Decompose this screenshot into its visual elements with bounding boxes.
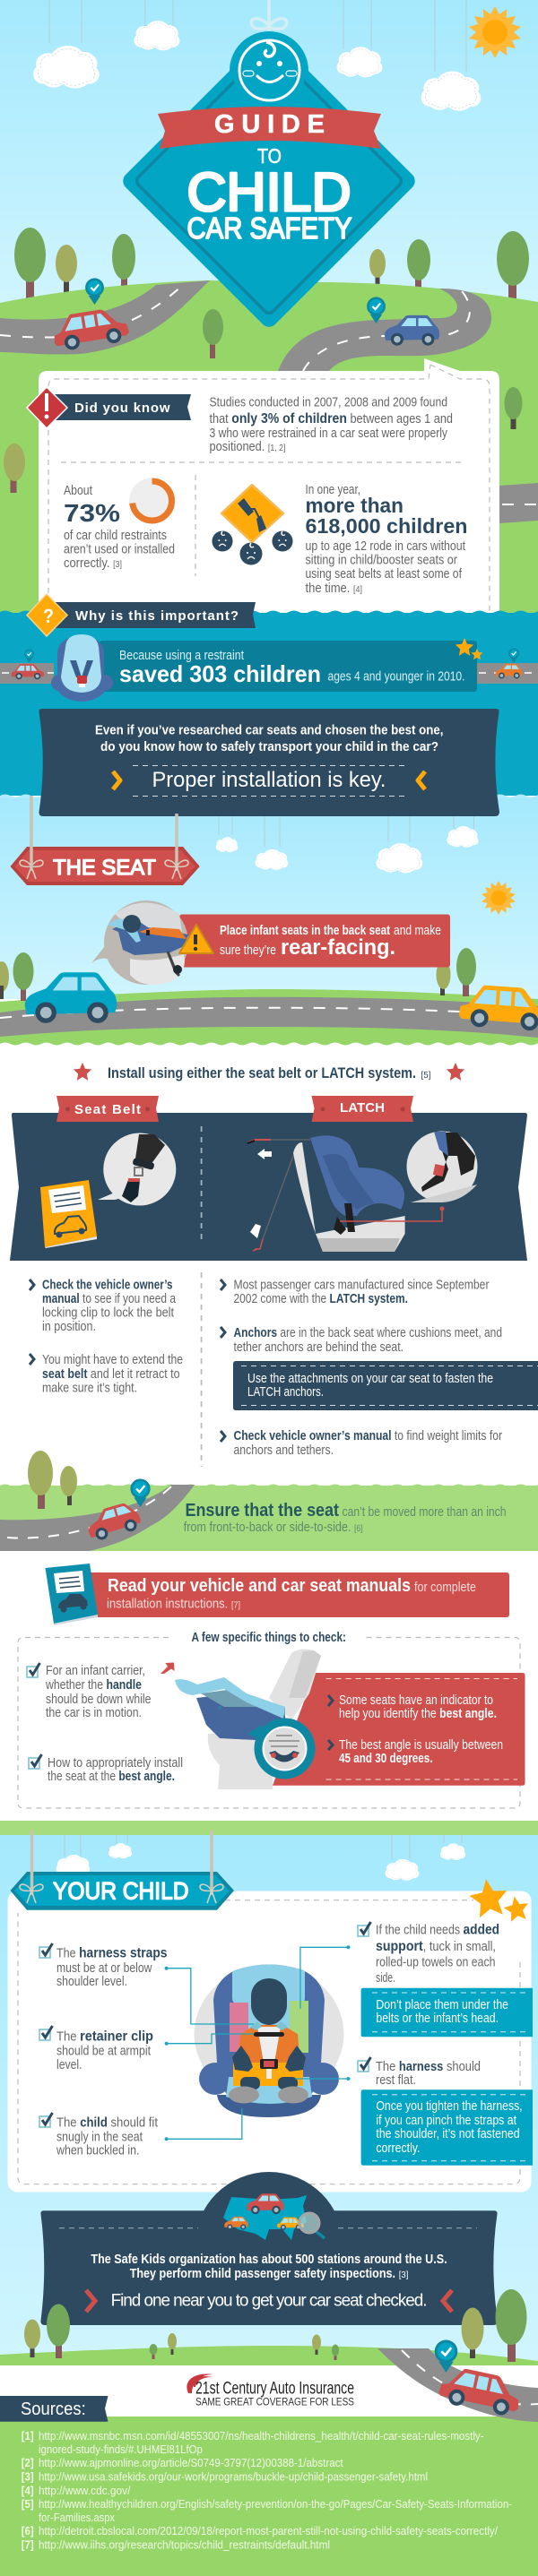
icon: manual book bbox=[45, 1564, 98, 1625]
diamond sign bbox=[119, 0, 419, 331]
hills bbox=[0, 280, 538, 618]
car: blue hatchback bbox=[25, 972, 117, 1023]
source list: [6] bbox=[22, 2525, 34, 2537]
checklist item: angle: the seat at the best angle. bbox=[48, 1770, 175, 1784]
title: GUIDE bbox=[214, 110, 325, 139]
source list: [3] bbox=[22, 2471, 34, 2484]
heading: the seat: THE SEAT bbox=[53, 856, 156, 880]
item: retainer clip: should be at armpit bbox=[56, 2045, 151, 2059]
stat: 618,000 children: more than bbox=[305, 494, 404, 517]
callout: rear-facing: Place infant seats in the back seat bbox=[220, 924, 390, 938]
ribbon bow bbox=[251, 0, 287, 30]
heading: why is this important: ? bbox=[43, 605, 54, 627]
callout: rear-facing: rear-facing. bbox=[281, 935, 395, 960]
item: harness flat: rest flat. bbox=[376, 2073, 416, 2088]
heading: A few specific things to check: bbox=[192, 1630, 346, 1645]
arrow: handle bbox=[161, 1663, 174, 1674]
item: harness straps: The harness straps bbox=[56, 1946, 168, 1960]
heading: the seat bbox=[11, 797, 200, 885]
tab: latch: LATCH bbox=[340, 1100, 385, 1116]
car: yellow wagon bbox=[458, 984, 538, 1032]
icon: warning triangle bbox=[179, 925, 213, 953]
source list: ignored-study-finds/#.UHMEl81LfOp bbox=[39, 2443, 203, 2456]
item: harness straps: must be at or below bbox=[56, 1961, 152, 1976]
callout: rear-facing: and make bbox=[394, 924, 441, 938]
text: ensure: can’t be moved more than an inch bbox=[343, 1505, 506, 1520]
item: harness straps bbox=[39, 1943, 168, 1989]
item: child fit: The child should fit bbox=[56, 2116, 158, 2131]
panel: safe kids bbox=[40, 2172, 498, 2325]
section: the seat bbox=[0, 797, 538, 1047]
donut chart bbox=[129, 478, 175, 523]
logo: 21st Century Auto Insurance bbox=[187, 2374, 354, 2408]
callout: angle: 45 and 30 degrees. bbox=[339, 1752, 432, 1766]
tree olive left bbox=[4, 444, 25, 493]
item: added support bbox=[358, 1922, 499, 1986]
seat belt list: locking clip to lock the belt bbox=[42, 1306, 174, 1321]
callout: angle: help you identify the best angle. bbox=[339, 1707, 497, 1721]
latch list bbox=[221, 1278, 502, 1458]
heading: why is this important bbox=[27, 594, 256, 636]
section: instructions text bbox=[0, 1272, 538, 1551]
text: stations: [3] bbox=[399, 2270, 409, 2280]
panel: dark illustrations bbox=[10, 1096, 527, 1261]
callout: towels: Don’t place them under the bbox=[376, 1998, 508, 2012]
checklist item: handle bbox=[27, 1663, 151, 1720]
title: CAR SAFETY bbox=[187, 211, 351, 245]
seat belt list: You might have to extend the bbox=[42, 1353, 183, 1367]
stat: 73 percent: About bbox=[64, 484, 92, 498]
item: harness straps: shoulder level. bbox=[56, 1975, 127, 1989]
seat belt list bbox=[30, 1278, 183, 1396]
item: harness flat bbox=[358, 2057, 481, 2088]
callout: attachments: LATCH anchors. bbox=[247, 1385, 324, 1400]
source list: http://www.usa.safekids.org/our-work/programs/buckle-up/child-passenger-safety.html bbox=[39, 2471, 428, 2484]
item: retainer clip: The retainer clip bbox=[56, 2029, 153, 2045]
heading: sources: Sources: bbox=[21, 2399, 86, 2419]
heading: your child: YOUR CHILD bbox=[53, 1878, 188, 1905]
stat: 618,000 children: the time. [4] bbox=[305, 582, 362, 596]
checklist item: handle: should be down while bbox=[46, 1693, 151, 1707]
illustration: US map with cars bbox=[223, 2193, 325, 2240]
text: ensure: Ensure that the seat bbox=[185, 1501, 339, 1521]
illustration: infant carrier on seat bbox=[175, 1650, 321, 1789]
item: retainer clip: level. bbox=[56, 2058, 82, 2072]
banner: Read your vehicle and car seat manuals bbox=[108, 1576, 411, 1596]
icon: angle gauge bbox=[247, 1719, 316, 1779]
left road bbox=[0, 280, 210, 355]
section: read the manuals bbox=[18, 1564, 525, 1808]
item: retainer clip bbox=[39, 2026, 153, 2072]
question text: Even if you’ve researched car seats and chosen the best one, bbox=[95, 722, 443, 738]
logo: 21st Century Auto Insurance: 21st Century Auto Insurance bbox=[195, 2380, 354, 2398]
car: red bbox=[83, 1500, 143, 1543]
icon: baby face bbox=[239, 40, 299, 100]
checklist item: handle: the car is in motion. bbox=[46, 1706, 142, 1720]
icon: sun bbox=[482, 881, 516, 915]
callout: attachments: Use the attachments on your car seat to fasten the bbox=[247, 1372, 493, 1386]
tab: seat belt: Seat Belt bbox=[74, 1102, 141, 1117]
text: studies bbox=[210, 396, 453, 454]
latch list: Check vehicle owner’s manual to find weight limits for bbox=[233, 1429, 502, 1443]
tree right bbox=[504, 387, 522, 429]
trees bbox=[24, 2289, 527, 2362]
chevrons bbox=[86, 2290, 452, 2312]
ribbon bbox=[158, 107, 381, 149]
connector lines bbox=[165, 1945, 350, 2141]
illustration: rear-facing infant seat bbox=[91, 900, 213, 985]
item: child fit: when buckled in. bbox=[56, 2143, 139, 2158]
item: added support: rolled-up towels on each bbox=[376, 1955, 495, 1969]
marker bbox=[435, 2340, 457, 2373]
banner: installation instructions. [7] bbox=[107, 1597, 240, 1611]
banner: for complete bbox=[414, 1581, 476, 1595]
checklist item: angle: How to appropriately install bbox=[48, 1756, 183, 1770]
illustration: seat belt buckle bubble bbox=[98, 1133, 176, 1206]
trees bbox=[0, 948, 476, 1001]
strings and clouds bbox=[65, 1835, 462, 1859]
seat belt list: in position. bbox=[42, 1320, 96, 1334]
stat: 73 percent: aren’t used or installed bbox=[64, 543, 175, 557]
source list: [5] bbox=[22, 2498, 34, 2511]
callout: rear-facing bbox=[179, 914, 450, 968]
text: stations: The Safe Kids organization has about 500 stations around the U.S. bbox=[91, 2252, 447, 2267]
callout: pinch test bbox=[361, 2089, 533, 2166]
illustration: child in seat bbox=[194, 1964, 344, 2117]
panel: proper installation bbox=[31, 709, 499, 874]
checklist item: handle: For an infant carrier, bbox=[46, 1664, 145, 1678]
road bbox=[0, 1485, 195, 1551]
title: CHILD bbox=[187, 162, 351, 222]
seat belt list: make sure it’s tight. bbox=[42, 1382, 137, 1396]
heading: why is this important: Why is this important? bbox=[75, 608, 239, 624]
source list: [2] bbox=[22, 2457, 34, 2469]
road bbox=[0, 997, 538, 1038]
callout: pinch test: if you can pinch the straps at bbox=[376, 2114, 516, 2128]
callout: rear-facing: sure they’re bbox=[220, 943, 276, 958]
callout: angle: Some seats have an indicator to bbox=[339, 1693, 493, 1708]
key message: Find one near you to get your car seat checked. bbox=[111, 2292, 428, 2310]
source list: [4] bbox=[22, 2485, 34, 2497]
source list: http://www.msnbc.msn.com/id/48553007/ns/health-childrens_health/t/child-car-seat-rules-mostly- bbox=[39, 2430, 484, 2442]
tree by road bbox=[203, 309, 223, 358]
text: studies: positioned. [1, 2] bbox=[210, 440, 286, 454]
latch list: 2002 come with the LATCH system. bbox=[233, 1292, 408, 1306]
stat: 73 percent bbox=[64, 478, 175, 571]
callout: towels bbox=[361, 1988, 533, 2037]
road strip with cars bbox=[0, 648, 538, 684]
banner bbox=[85, 1572, 509, 1617]
strings and clouds bbox=[219, 816, 473, 847]
question text bbox=[95, 722, 443, 754]
water band wave overlay bbox=[0, 609, 538, 622]
car: red wagon bbox=[437, 2365, 524, 2418]
source list: [7] bbox=[22, 2539, 34, 2552]
red car bbox=[50, 278, 131, 352]
icon: car seat bbox=[51, 634, 113, 702]
icon: owner's manual book bbox=[40, 1180, 97, 1248]
text: stations bbox=[91, 2252, 447, 2281]
callout band: ages 4 and younger in 2010. bbox=[328, 670, 464, 685]
callout band: Because using a restraint bbox=[119, 649, 244, 663]
heading: sources bbox=[0, 2396, 108, 2422]
panel: did you know bbox=[4, 358, 538, 618]
seat belt list: manual to see if you need a bbox=[42, 1292, 177, 1306]
question text: do you know how to safely transport your child in the car? bbox=[100, 739, 438, 754]
callout: attachments bbox=[233, 1361, 538, 1410]
source list: for-Families.aspx bbox=[39, 2511, 116, 2524]
stat: 73 percent: of car child restraints bbox=[64, 529, 167, 543]
stat: 618,000 children: 618,000 children bbox=[305, 514, 468, 538]
section: your child bbox=[7, 1831, 533, 2192]
text: studies: that only 3% of children between ages 1 and bbox=[210, 411, 453, 426]
illustration: latch connector bubble bbox=[407, 1131, 477, 1202]
callout band bbox=[100, 638, 482, 692]
latch list: Most passenger cars manufactured since September bbox=[233, 1278, 490, 1292]
item: child fit bbox=[39, 2113, 158, 2158]
hero scene bbox=[0, 0, 538, 618]
source list: [1] bbox=[22, 2430, 34, 2442]
cloud strings bbox=[49, 0, 466, 72]
seat belt list: seat belt and let it retract to bbox=[42, 1367, 179, 1382]
stat: 73 percent: 73% bbox=[64, 499, 120, 527]
heading: Install using either the seat belt or LATCH system. bbox=[108, 1064, 416, 1081]
checklist item: angle bbox=[29, 1754, 183, 1784]
stat: 618,000 children: In one year, bbox=[305, 483, 360, 497]
panel: things to check bbox=[18, 1630, 525, 1808]
latch list: tether anchors are behind the seat. bbox=[233, 1340, 404, 1355]
item: added support: support, tuck in small, bbox=[376, 1939, 496, 1954]
text: stations: They perform child passenger safety inspections. bbox=[130, 2266, 395, 2281]
item: child fit: snugly in the seat bbox=[56, 2131, 143, 2145]
marker bbox=[130, 1478, 151, 1507]
item: added support: If the child needs added bbox=[376, 1923, 499, 1937]
callout: pinch test: correctly. bbox=[376, 2141, 420, 2156]
stat: 618,000 children: using seat belts at least some of bbox=[305, 567, 463, 582]
icon: red warning diamond bbox=[27, 387, 67, 428]
text: ensure bbox=[184, 1501, 506, 1535]
clouds bbox=[33, 21, 481, 111]
title bbox=[187, 110, 351, 245]
illustration: latch seat bbox=[247, 1135, 445, 1252]
band: ensure the seat bbox=[0, 1451, 506, 1551]
heading: your child bbox=[11, 1868, 234, 1910]
road bbox=[377, 2348, 538, 2422]
icon: seat belt sign with children bbox=[212, 485, 293, 564]
right road bbox=[278, 289, 491, 371]
trees bbox=[28, 1451, 77, 1509]
source list: http://www.ajpmonline.org/article/S0749-3797(12)00388-1/abstract bbox=[39, 2457, 343, 2469]
callout band: saved 303 children bbox=[119, 660, 321, 687]
item: added support: side. bbox=[376, 1971, 395, 1986]
callout: towels: belts or the infant’s head. bbox=[376, 2012, 499, 2026]
title: TO bbox=[257, 144, 282, 168]
stat: 618,000 children: up to age 12 rode in cars without bbox=[305, 539, 465, 554]
callout: angle: The best angle is usually between bbox=[339, 1738, 503, 1753]
callout: angle bbox=[273, 1673, 525, 1786]
text: ensure: from front-to-back or side-to-side. [6] bbox=[184, 1521, 363, 1535]
latch list: anchors and tethers. bbox=[233, 1443, 334, 1458]
text: studies: Studies conducted in 2007, 2008 and 2009 found bbox=[210, 396, 447, 410]
blue car bbox=[367, 297, 439, 346]
checklist item: handle: whether the handle bbox=[45, 1678, 142, 1693]
section: install methods bbox=[10, 1063, 527, 1261]
side road bbox=[499, 483, 538, 523]
heading: did you know: Did you know bbox=[74, 401, 170, 416]
item: harness flat: The harness should bbox=[376, 2060, 481, 2074]
chevrons bbox=[113, 771, 425, 789]
source list: http://detroit.cbslocal.com/2012/09/18/report-most-parent-still-not-using-child-safety-seats-correctly/ bbox=[39, 2525, 498, 2537]
icon: stars bbox=[467, 1876, 531, 1923]
ground scene bbox=[0, 2289, 538, 2552]
section: why is this important bbox=[0, 594, 538, 702]
text: studies: 3 who were restrained in a car seat were properly bbox=[210, 426, 448, 441]
source list: http://www.iihs.org/research/topics/child_restraints/default.html bbox=[39, 2539, 330, 2552]
heading: did you know bbox=[27, 387, 191, 428]
logo: 21st Century Auto Insurance: SAME GREAT COVERAGE FOR LESS bbox=[195, 2398, 354, 2408]
icon: sun bbox=[469, 6, 521, 58]
heading: [5] bbox=[421, 1071, 431, 1081]
source list bbox=[22, 2430, 512, 2552]
key message: Proper installation is key. bbox=[152, 768, 386, 792]
stat: 618,000 children: sitting in child/booster seats or bbox=[305, 554, 457, 568]
icon: stars bbox=[456, 638, 482, 659]
icon: magnifier bbox=[299, 2213, 325, 2238]
panel: your child bbox=[7, 1868, 533, 2192]
stat: 618,000 children bbox=[305, 483, 468, 596]
source list: http://www.cdc.gov/ bbox=[39, 2485, 131, 2497]
trees bbox=[14, 228, 529, 304]
tab: latch bbox=[312, 1096, 413, 1122]
stat: 73 percent: correctly. [3] bbox=[64, 556, 122, 571]
seat belt list: Check the vehicle owner’s bbox=[42, 1278, 172, 1292]
tab: seat belt bbox=[56, 1096, 159, 1122]
